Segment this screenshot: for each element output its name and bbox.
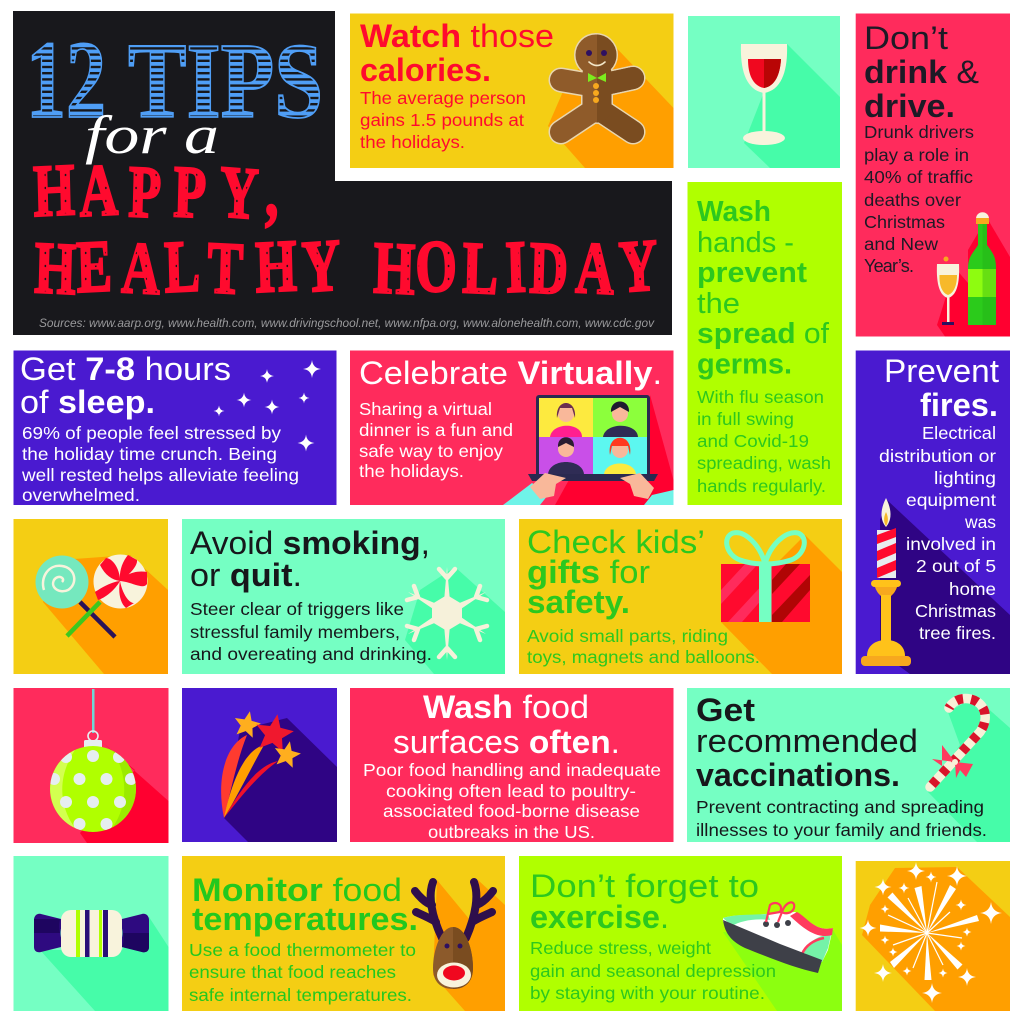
body text: overwhelmed. — [22, 485, 140, 505]
panel: wine glass — [688, 16, 840, 168]
heading: surfaces often. — [393, 724, 620, 760]
body text: Electrical — [922, 423, 996, 443]
body text: Sharing a virtual — [359, 399, 492, 419]
body text — [190, 599, 432, 664]
body text: the holiday time crunch. Being — [22, 444, 277, 464]
heading: drive. — [864, 88, 955, 124]
body text: dinner is a fun and — [359, 420, 513, 440]
body text — [21, 423, 299, 505]
panel: vaccinations — [687, 688, 1010, 842]
body text: Christmas — [864, 212, 945, 232]
icon: sparkler — [860, 862, 1002, 1003]
heading — [20, 351, 231, 420]
body text: With flu season — [697, 387, 824, 407]
panel: sleep — [14, 350, 336, 505]
body text: safe internal temperatures. — [189, 985, 412, 1005]
heading: Wash food — [423, 689, 589, 725]
body text — [189, 940, 416, 1005]
body text: toys, magnets and balloons. — [527, 647, 760, 667]
body text: in full swing — [697, 409, 794, 429]
heading: 12 Tips: 12 — [26, 19, 106, 142]
body text: 2 out of 5 — [916, 556, 996, 576]
heading — [697, 196, 830, 380]
heading: Don’t — [864, 20, 948, 56]
heading — [192, 872, 418, 937]
body text — [359, 399, 513, 481]
icon: sneaker — [723, 902, 833, 973]
heading: Celebrate Virtually . — [359, 355, 662, 391]
panel: wash food surfaces — [350, 688, 674, 842]
body text: play a role in — [864, 145, 969, 165]
body text: the holidays. — [359, 461, 464, 481]
heading: fires. — [920, 387, 998, 423]
heading: Healthy Holiday: HEALTHY HOLIDAY — [34, 224, 659, 310]
heading: vaccinations. — [696, 757, 900, 793]
heading line 2: calories. — [360, 52, 491, 88]
body text: involved in — [906, 534, 996, 554]
body text: lighting — [934, 468, 996, 488]
heading: the — [697, 288, 740, 320]
body text — [527, 626, 760, 667]
heading — [190, 525, 430, 593]
panel: candy — [14, 856, 168, 1011]
body text: associated food-borne disease — [383, 801, 640, 821]
body text: outbreaks in the US. — [428, 822, 595, 842]
body text: Steer clear of triggers like — [190, 599, 404, 619]
icon: bottle and champagne glass — [937, 212, 996, 325]
heading: gifts for — [527, 554, 650, 590]
body text — [879, 423, 996, 643]
heading: Watch those — [360, 18, 554, 54]
icon: stars — [214, 360, 321, 452]
body text: Year’s. — [864, 256, 914, 276]
heading: Don’t forget to — [530, 868, 759, 904]
body text: Prevent contracting and spreading — [696, 797, 984, 817]
body text: Drunk drivers — [864, 122, 974, 142]
body text: hands regularly. — [697, 476, 826, 496]
body text: deaths over — [864, 190, 961, 210]
heading: Happy: HAPPY, — [32, 149, 278, 235]
heading: Get 7-8 hours — [20, 351, 231, 387]
body text: The average person — [360, 88, 526, 108]
heading — [393, 689, 620, 760]
heading: temperatures. — [192, 901, 418, 937]
icon: candle — [861, 498, 911, 666]
heading: or quit. — [190, 557, 302, 593]
body text: ensure that food reaches — [189, 962, 396, 982]
panel: wash hands — [688, 182, 842, 505]
icon: ornament — [48, 689, 137, 832]
heading: exercise. — [530, 899, 669, 935]
heading — [864, 20, 979, 124]
body text: cooking often lead to poultry- — [386, 781, 636, 801]
heading: drink & — [864, 54, 979, 90]
heading — [530, 868, 759, 935]
heading: 12 Tips: TIPS — [128, 22, 323, 141]
heading — [527, 524, 705, 620]
heading — [696, 692, 918, 793]
body text: Reduce stress, weight — [530, 938, 711, 958]
body text: home — [949, 579, 996, 599]
body text — [697, 387, 831, 496]
body text — [530, 938, 776, 1003]
body text: safe way to enjoy — [359, 441, 503, 461]
panel: ornament — [14, 688, 168, 843]
body text: and overeating and drinking. — [190, 644, 432, 664]
heading: Avoid smoking, — [190, 525, 430, 561]
panel: watch those calories — [350, 14, 674, 168]
heading: Get — [696, 692, 755, 728]
heading: for a: for a — [85, 105, 219, 165]
heading: Monitor food — [192, 872, 402, 908]
panel: sparkler — [856, 861, 1010, 1011]
icon: candy cane — [930, 699, 985, 787]
body text — [363, 760, 661, 842]
heading: Check kids’ — [527, 524, 705, 560]
panel: exercise — [519, 856, 842, 1011]
body text: 69% of people feel stressed by — [22, 423, 281, 443]
body text: Use a food thermometer to — [189, 940, 416, 960]
panel: don't drink and drive — [856, 14, 1010, 336]
icon: wrapped candy — [34, 910, 149, 957]
body text: by staying with your routine. — [530, 983, 765, 1003]
panel: monitor food temperatures — [182, 856, 505, 1011]
body text — [360, 88, 526, 152]
icon: shooting stars — [221, 709, 303, 818]
body text: and New — [864, 234, 938, 254]
heading: hands - — [697, 227, 794, 259]
icon: laptop video call — [503, 395, 674, 505]
heading: prevent — [697, 257, 807, 289]
body text: Christmas — [915, 601, 996, 621]
icon: lollipops — [36, 554, 148, 637]
icon: gingerbread man — [561, 33, 633, 132]
body text: 40% of traffic — [864, 167, 973, 187]
icon: snowflake — [407, 567, 487, 660]
panel: lollipops — [14, 519, 168, 674]
panel: fireworks — [182, 688, 337, 842]
body text: tree fires. — [919, 623, 996, 643]
body text: Poor food handling and inadequate — [363, 760, 661, 780]
body text: Avoid small parts, riding — [527, 626, 728, 646]
body text: distribution or — [879, 446, 996, 466]
icon: reindeer — [415, 882, 493, 989]
panel: celebrate virtually — [350, 350, 674, 505]
icon: gift box — [721, 533, 810, 622]
heading: of sleep. — [20, 384, 155, 420]
body text: and Covid-19 — [697, 431, 809, 451]
body text: illnesses to your family and friends. — [696, 820, 987, 840]
heading: recommended — [696, 723, 918, 759]
body text: spreading, wash — [697, 453, 831, 473]
body text: well rested helps alleviate feeling — [21, 465, 299, 485]
panel: title — [13, 11, 672, 335]
body text: was — [964, 512, 996, 532]
icon: wine glass — [741, 44, 787, 145]
panel: avoid smoking — [182, 519, 505, 674]
heading — [884, 353, 999, 423]
heading: Wash — [697, 196, 771, 228]
body text: gains 1.5 pounds at — [360, 110, 524, 130]
heading: germs. — [697, 348, 792, 380]
body text: stressful family members, — [190, 622, 400, 642]
heading: 12 Tips — [26, 19, 323, 142]
panel: prevent fires — [856, 350, 1010, 674]
sources: Sources: www.aarp.org, www.health.com, www.drivingschool.net, www.nfpa.org, www.alonehealth.com, www.cdc.gov — [39, 318, 655, 330]
heading: spread of — [697, 318, 830, 350]
body text: the holidays. — [360, 132, 465, 152]
heading: Prevent — [884, 353, 999, 389]
body text — [864, 122, 974, 276]
heading: safety. — [527, 584, 630, 620]
panel: check kids gifts — [519, 519, 842, 674]
body text: equipment — [906, 490, 996, 510]
body text — [696, 797, 987, 840]
hands — [503, 473, 674, 505]
body text: gain and seasonal depression — [530, 961, 776, 981]
